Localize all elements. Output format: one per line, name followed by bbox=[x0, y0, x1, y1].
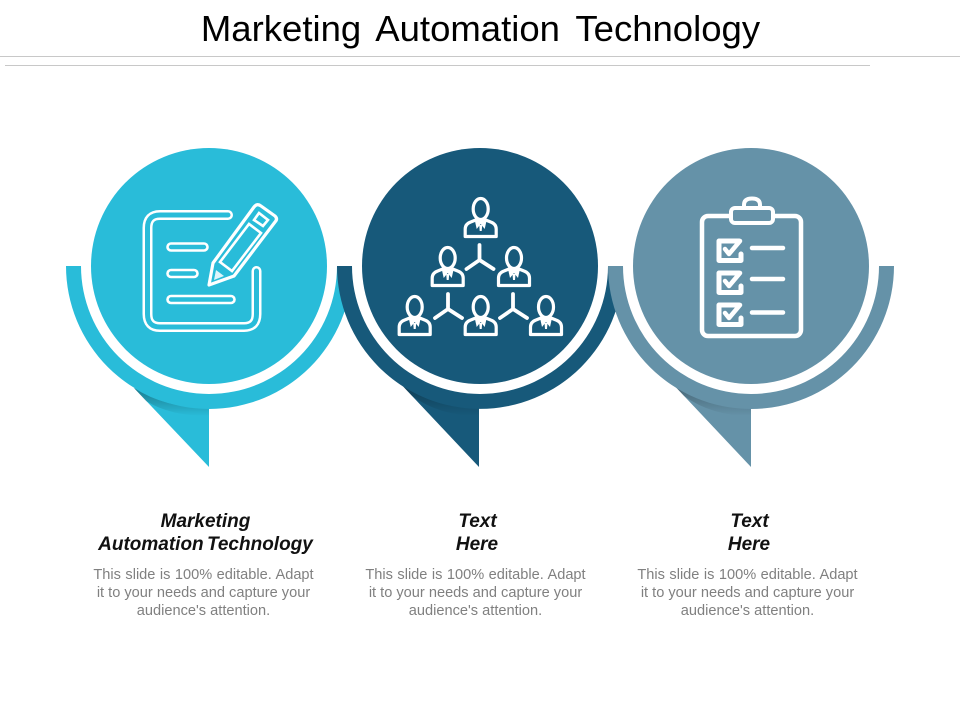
text block 3: Here bbox=[728, 534, 771, 555]
arc 2 bbox=[337, 266, 623, 409]
header rule: full width bbox=[0, 56, 960, 57]
header rule: short bbox=[5, 65, 870, 66]
text block 1: it to your needs and capture your bbox=[97, 585, 310, 601]
text block 3: Text bbox=[730, 511, 769, 532]
icon: people hierarchy bbox=[399, 198, 562, 334]
panel: team hierarchy graphic bbox=[337, 148, 623, 467]
text block 1: Automation Technology bbox=[97, 534, 314, 555]
text block 2: This slide is 100% editable. Adapt bbox=[365, 567, 586, 583]
panel: marketing automation graphic bbox=[66, 148, 352, 467]
text block 1: Marketing bbox=[161, 511, 251, 532]
circle 1 bbox=[91, 148, 327, 384]
circle 3 bbox=[633, 148, 869, 384]
text block 3: audience's attention. bbox=[681, 603, 814, 619]
text block 2: Text bbox=[458, 511, 497, 532]
text block 2: it to your needs and capture your bbox=[369, 585, 582, 601]
title: Marketing Automation Technology bbox=[201, 8, 761, 49]
text block 3: This slide is 100% editable. Adapt bbox=[637, 567, 858, 583]
pointer tail 2 bbox=[398, 381, 479, 467]
text block 3 bbox=[637, 511, 858, 619]
text block 1: audience's attention. bbox=[137, 603, 270, 619]
arc 1 bbox=[66, 266, 352, 409]
text block 2: Here bbox=[456, 534, 499, 555]
text block 2 bbox=[365, 511, 586, 619]
icon: document with pencil bbox=[148, 205, 276, 327]
pointer tail 3 bbox=[670, 381, 751, 467]
text block 1: This slide is 100% editable. Adapt bbox=[93, 567, 314, 583]
pointer tail 1 bbox=[134, 388, 209, 467]
arc 3 bbox=[608, 266, 894, 409]
text block 1 bbox=[93, 511, 314, 619]
circle 2 bbox=[362, 148, 598, 384]
icon: clipboard checklist bbox=[702, 198, 801, 336]
panel: checklist graphic bbox=[608, 148, 894, 467]
text block 3: it to your needs and capture your bbox=[641, 585, 854, 601]
text block 2: audience's attention. bbox=[409, 603, 542, 619]
